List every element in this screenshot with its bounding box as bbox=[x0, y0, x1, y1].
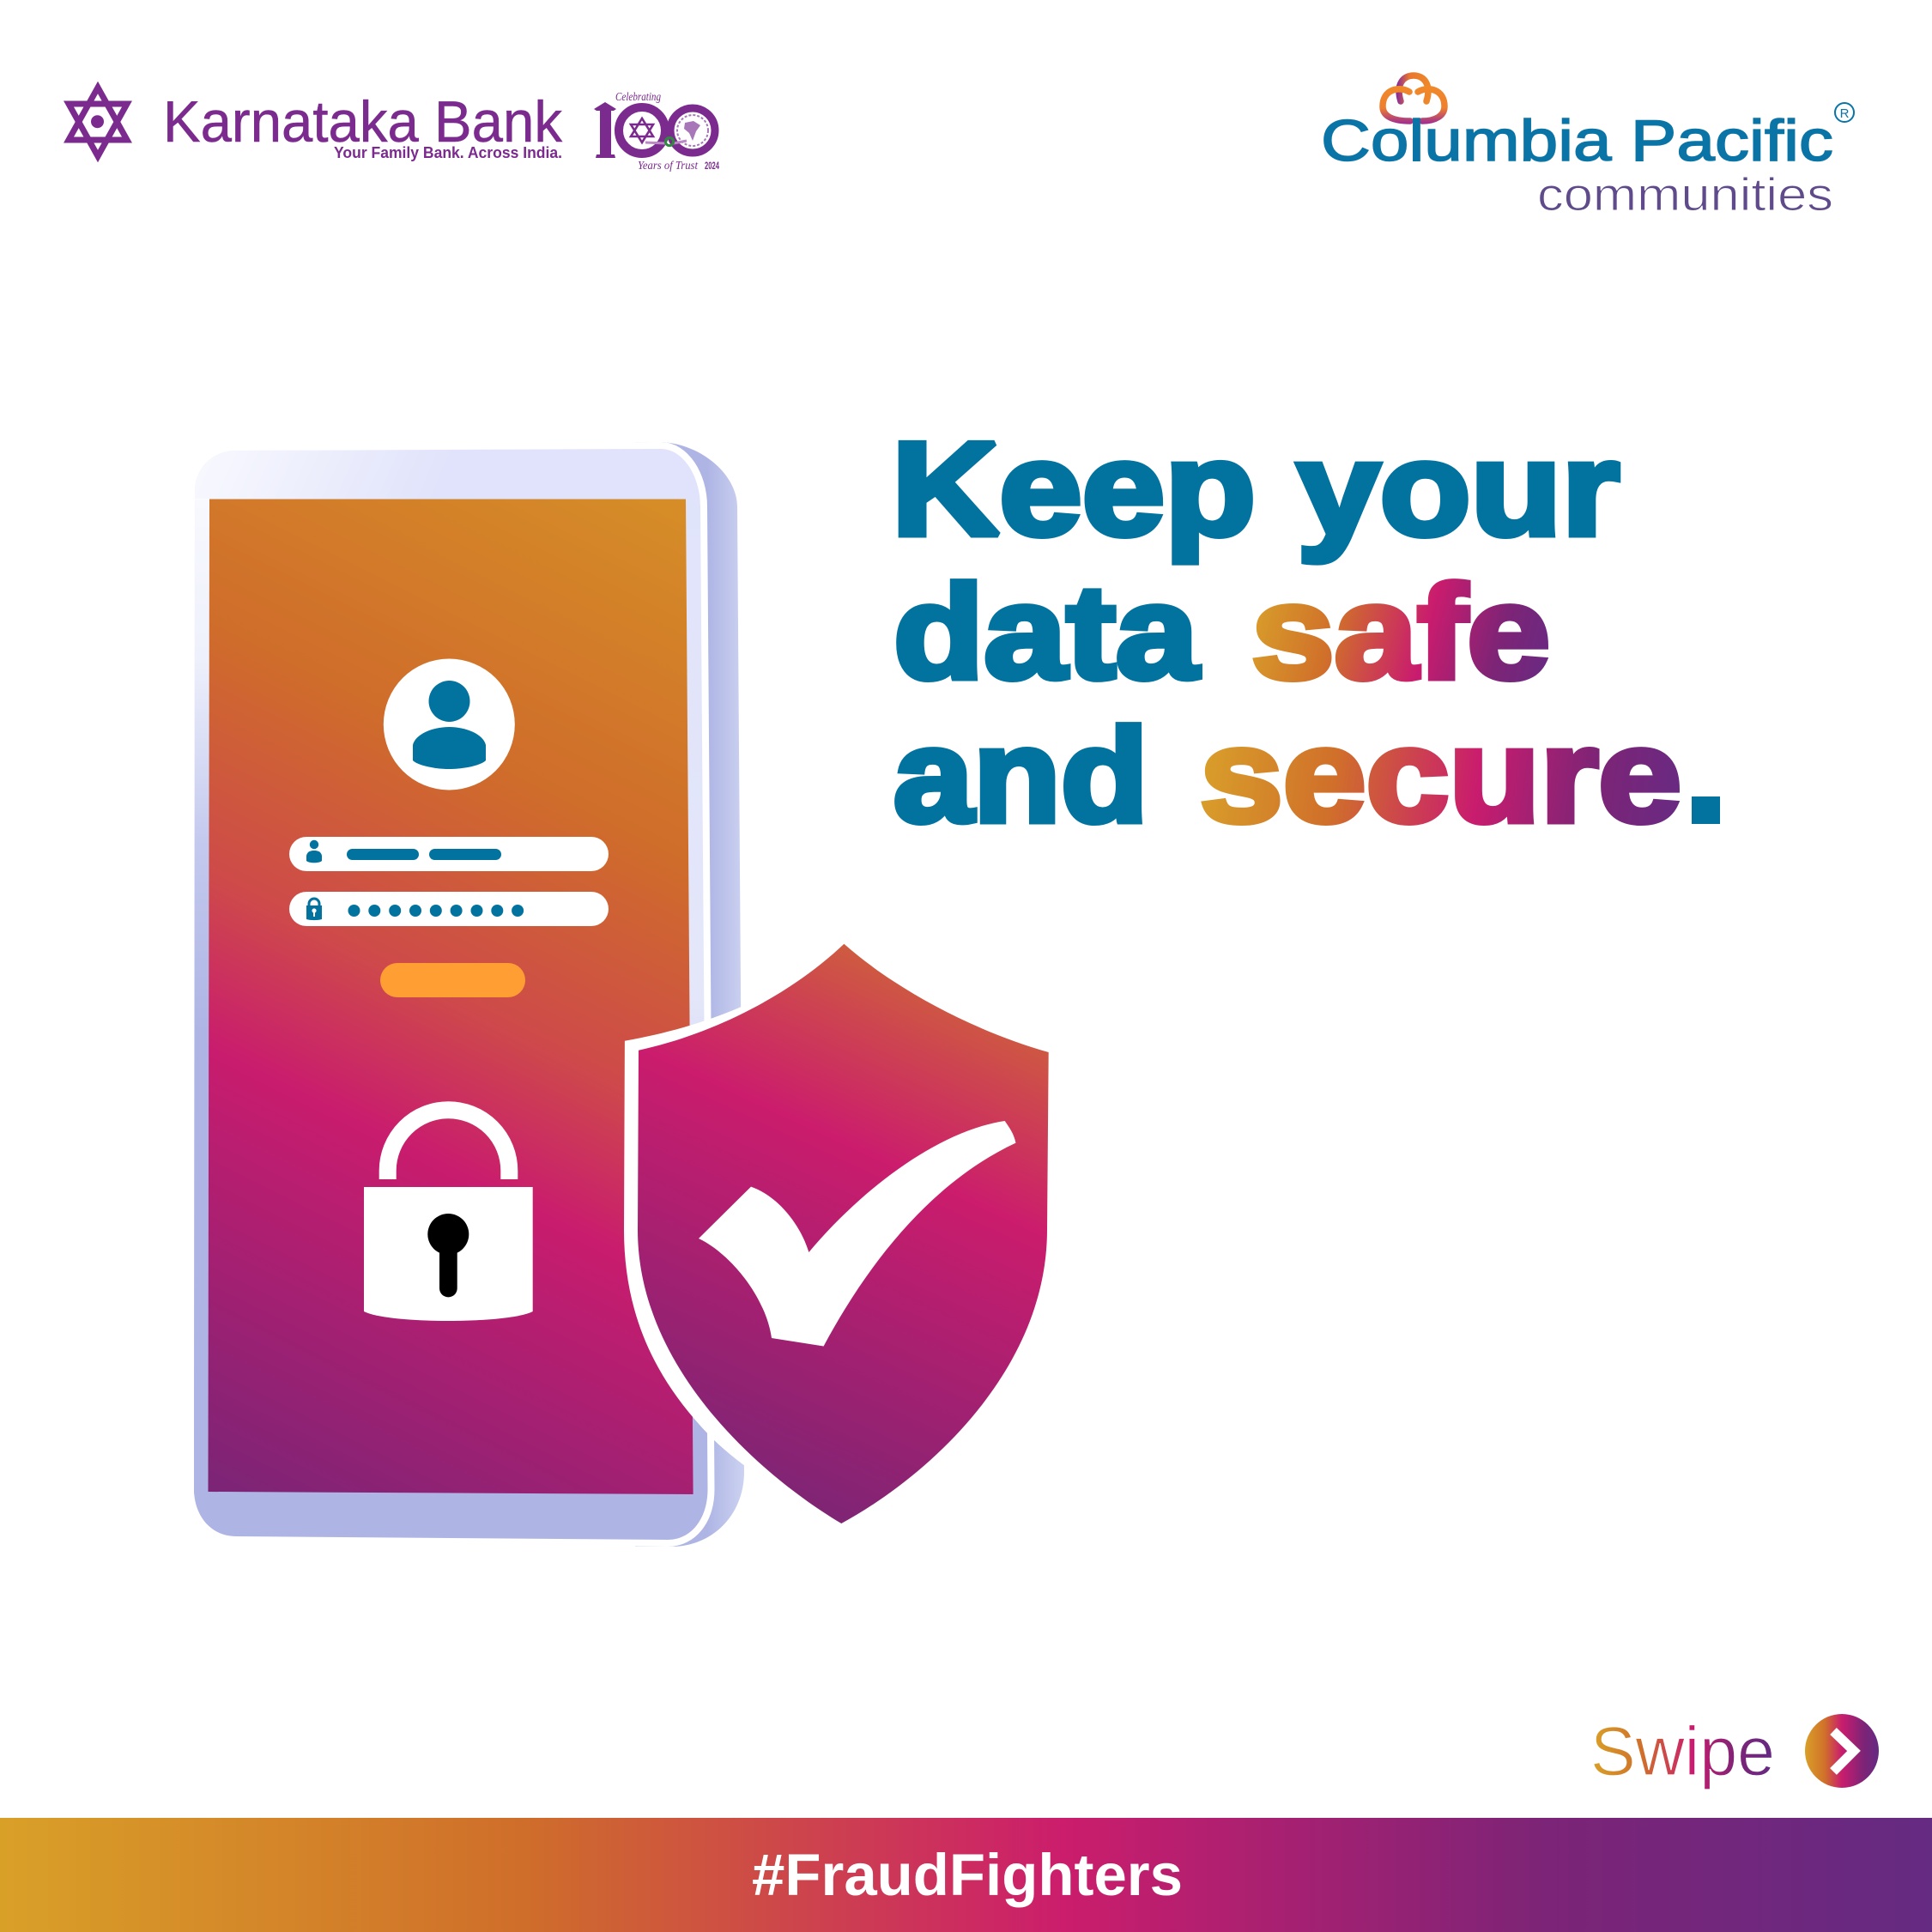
headline line 2: safe: safe bbox=[1251, 558, 1550, 706]
icon: second zero ring bbox=[670, 108, 715, 153]
padlock icon bbox=[364, 1110, 533, 1321]
icon: first zero ring bbox=[619, 107, 665, 154]
password field bbox=[289, 892, 609, 926]
swipe prompt bbox=[1590, 1713, 1879, 1790]
tagline: Your Family Bank. Across India. bbox=[334, 144, 562, 161]
icon: map of India seal bbox=[677, 115, 708, 146]
shield body bbox=[638, 944, 1049, 1523]
avatar icon bbox=[384, 659, 515, 790]
logo: celebrating 100 years of trust bbox=[594, 91, 719, 173]
headline line 3: full stop bbox=[1692, 796, 1720, 824]
text: Years of Trust: Years of Trust bbox=[638, 160, 699, 173]
headline bbox=[892, 415, 1720, 850]
wordmark: Columbia Pacific: Columbia Pacific bbox=[1321, 108, 1833, 173]
illustration: shield with check mark bbox=[624, 943, 1049, 1524]
logo: Columbia Pacific communities bbox=[1321, 76, 1854, 221]
footer bar bbox=[0, 1818, 1932, 1932]
headline line 3: secure: secure bbox=[1200, 701, 1681, 850]
login button bbox=[380, 963, 525, 997]
registered mark: R bbox=[1840, 106, 1850, 121]
headline line 3: and: and bbox=[893, 701, 1148, 850]
icon: pillar bbox=[594, 102, 616, 158]
text: 2024: 2024 bbox=[705, 160, 719, 172]
phone back edge bbox=[635, 442, 744, 1547]
phone screen bbox=[208, 500, 693, 1494]
headline line 2: data: data bbox=[893, 558, 1200, 706]
icon: swipe arrow bbox=[1805, 1714, 1879, 1788]
wordmark: Karnataka Bank: Karnataka Bank bbox=[163, 89, 563, 154]
check mark bbox=[699, 1121, 1016, 1346]
hashtag: #FraudFighters bbox=[752, 1842, 1183, 1908]
wordmark: communities: communities bbox=[1537, 169, 1833, 221]
registered mark bbox=[1835, 103, 1854, 122]
username field bbox=[289, 837, 609, 871]
illustration: phone bbox=[194, 442, 744, 1547]
logo: Karnataka Bank bbox=[69, 88, 563, 161]
headline line 1: Keep your bbox=[892, 415, 1620, 563]
icon: Karnataka Bank star bbox=[69, 88, 127, 156]
shield white outline bbox=[624, 943, 844, 1524]
phone body bbox=[194, 446, 707, 1540]
connector with green link bbox=[645, 137, 687, 146]
icon: small star bbox=[631, 118, 653, 142]
icon: cloud rings bbox=[1383, 76, 1444, 121]
text: Swipe: Swipe bbox=[1590, 1713, 1775, 1790]
text: Celebrating: Celebrating bbox=[615, 91, 661, 104]
